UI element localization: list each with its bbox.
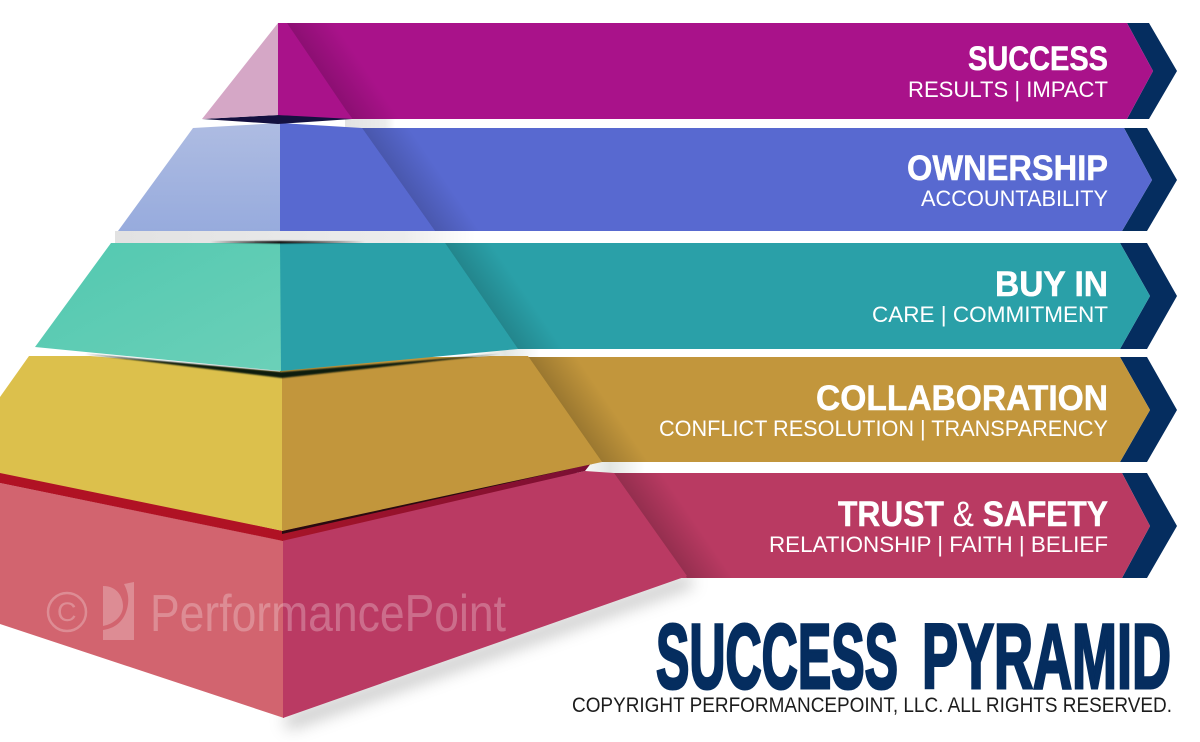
watermark: PerformancePoint: C — [57, 597, 76, 627]
shadow under tier 2 — [210, 241, 365, 244]
pyramid tier 5: rose base — [0, 461, 687, 718]
ribbon: collaboration: CONFLICT RESOLUTION | TRANSPARENCY — [659, 416, 1108, 441]
ribbon: collaboration: COLLABORATION — [816, 379, 1108, 418]
ribbon: ownership: ACCOUNTABILITY — [921, 186, 1108, 211]
gap shading between tiers — [115, 119, 645, 473]
shadow under tier 3 — [85, 354, 500, 378]
ribbon: buy in: CARE | COMMITMENT — [872, 302, 1108, 327]
ribbon: ownership: OWNERSHIP — [907, 149, 1108, 188]
ribbon: success — [278, 23, 1177, 119]
ribbon: collaboration — [280, 357, 1177, 462]
ribbon: trust and safety: TRUST & SAFETY — [838, 495, 1108, 534]
ribbon: success: RESULTS | IMPACT — [908, 77, 1108, 102]
pyramid tier 3: teal — [35, 243, 518, 371]
pyramid tier 2: blue — [118, 123, 435, 231]
watermark: PerformancePoint — [48, 582, 506, 643]
ribbon: success: SUCCESS — [968, 40, 1108, 78]
ground shadow under pyramid — [284, 574, 694, 730]
ribbon: trust and safety — [280, 473, 1177, 578]
ribbon: buy in — [280, 243, 1177, 349]
shadow under tier 1 — [202, 115, 352, 124]
ribbon: ownership — [280, 128, 1177, 231]
title: SUCCESS — [656, 606, 898, 708]
ribbon: buy in: BUY IN — [995, 265, 1108, 304]
watermark: PerformancePoint: PerformancePoint — [150, 585, 506, 643]
ribbon: trust and safety: RELATIONSHIP | FAITH | BELIEF — [769, 532, 1108, 557]
pyramid tier 1: magenta apex — [202, 23, 352, 119]
pyramid tier 4: gold — [0, 356, 602, 531]
